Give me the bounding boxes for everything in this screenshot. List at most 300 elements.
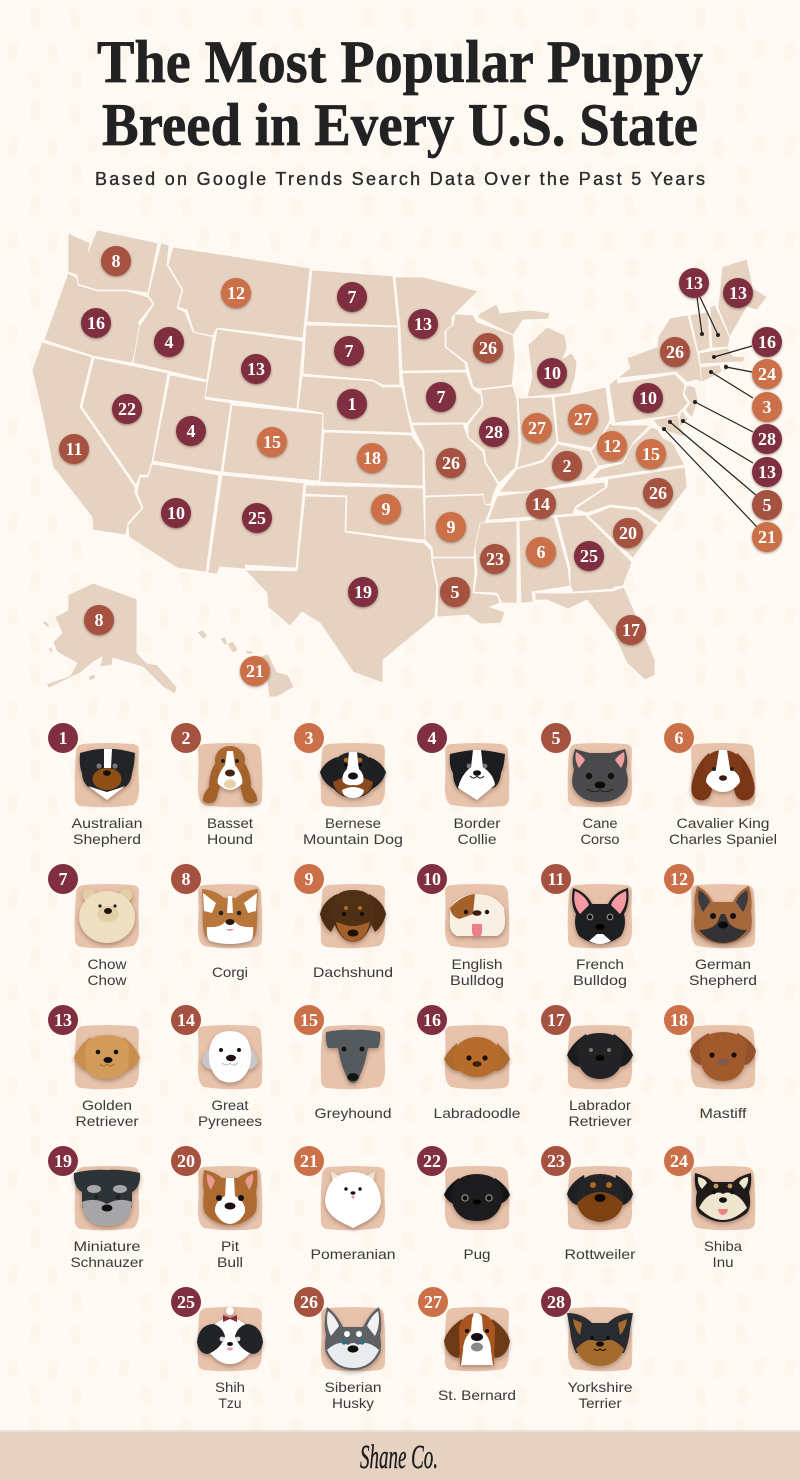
- label: Mountain Dog: [303, 831, 403, 847]
- badge: MN: 13: [414, 314, 432, 334]
- label: Bulldog: [450, 972, 504, 988]
- badge: OR: 16: [87, 313, 105, 333]
- state: NE: [298, 376, 412, 433]
- label: Miniature: [74, 1238, 141, 1254]
- state: OR: [44, 273, 153, 363]
- state: HI: [197, 630, 294, 697]
- badge: MD: 5: [762, 495, 772, 515]
- label: [704, 1238, 742, 1270]
- label: Basset: [207, 815, 253, 831]
- state: NY: [618, 315, 703, 383]
- badge: 2: 2: [182, 728, 190, 748]
- label: Retriever: [76, 1113, 139, 1129]
- badge: 22: 22: [423, 1151, 441, 1171]
- badge: NY: 26: [666, 342, 684, 362]
- state: MS: [474, 521, 517, 603]
- label: Labradoodle: [433, 1105, 521, 1121]
- label: [573, 956, 627, 988]
- state: MI: [477, 304, 577, 397]
- breed 11: French Bulldog: [541, 864, 632, 988]
- badge: VT and NH: [679, 268, 709, 298]
- face: Chow Chow: [79, 888, 135, 943]
- label: Yorkshire: [568, 1379, 633, 1395]
- state: KS: [320, 432, 423, 486]
- title: The Most Popular Puppy: [97, 29, 703, 95]
- label: Inu: [712, 1254, 734, 1270]
- label: Greyhound: [314, 1105, 392, 1121]
- badge: WI: 26: [479, 338, 497, 358]
- badge: 6: 6: [674, 728, 684, 748]
- label: Husky: [332, 1395, 374, 1411]
- badge: IL: 28: [485, 422, 503, 442]
- state: NJ: [684, 385, 698, 418]
- badge: SC: 20: [619, 523, 637, 543]
- label: [303, 815, 403, 847]
- badge: CA: [59, 434, 89, 464]
- badge: MO: 26: [442, 453, 460, 473]
- label: Siberian: [324, 1379, 382, 1395]
- badge: 12: 12: [670, 869, 688, 889]
- badge: PA: [633, 383, 663, 413]
- label: Dachshund: [313, 964, 393, 980]
- label: French: [576, 956, 624, 972]
- badge: 18: 18: [670, 1010, 688, 1030]
- face: Golden Retriever: [74, 1035, 140, 1079]
- badge: GA: 25: [580, 546, 598, 566]
- face: St. Bernard: [444, 1313, 510, 1365]
- badge: OH: [568, 404, 598, 434]
- badge: 5: 5: [552, 728, 560, 748]
- badge: AR: [436, 512, 466, 542]
- badge: VA: 15: [642, 444, 660, 464]
- state: IA: [402, 372, 482, 423]
- state: AZ: [128, 464, 219, 572]
- badge: 9: 9: [304, 869, 314, 889]
- badge: AR: 9: [446, 517, 456, 537]
- label: [580, 815, 620, 847]
- breed 16: Labradoodle: [417, 1005, 521, 1121]
- badge: NJ: 28: [758, 429, 776, 449]
- badge: MS: 23: [486, 549, 504, 569]
- badge: OR: [81, 308, 111, 338]
- map of U.S. states: [32, 230, 767, 697]
- label: [568, 1379, 633, 1411]
- badge: OK: [371, 494, 401, 524]
- label: Pyrenees: [198, 1113, 262, 1129]
- badge: AZ: [161, 498, 191, 528]
- badge: UT: [176, 416, 206, 446]
- state: AR: [425, 495, 492, 557]
- badge: WV: 12: [603, 436, 621, 456]
- breed 15: Greyhound: [294, 1005, 392, 1121]
- badge: 15: 15: [300, 1010, 318, 1030]
- state: CT: [700, 365, 722, 382]
- label: Corgi: [212, 964, 248, 980]
- state: KY: [499, 444, 598, 492]
- state: FL: [535, 587, 655, 680]
- badge: NY: [660, 337, 690, 367]
- label: [669, 815, 777, 847]
- badge: VT and NH: 13: [685, 273, 703, 293]
- label: Corso: [580, 831, 620, 847]
- state: ID: [133, 243, 213, 380]
- label: [689, 956, 757, 988]
- state: OH: [554, 387, 610, 448]
- label: Great: [212, 1097, 249, 1113]
- breed 25: Shih Tzu: [171, 1287, 263, 1411]
- badge: MO: [436, 448, 466, 478]
- label: Chow: [88, 956, 127, 972]
- badge: HI: 21: [246, 661, 264, 681]
- state: NM: [208, 475, 304, 574]
- breed 12: German Shepherd: [664, 864, 757, 988]
- badge: 25: 25: [177, 1292, 195, 1312]
- label: Retriever: [568, 1113, 632, 1129]
- leader lines: [662, 297, 757, 527]
- label: [217, 1238, 243, 1270]
- badge: MS: [480, 544, 510, 574]
- badge: KY: [552, 451, 582, 481]
- badge: MT: 12: [227, 283, 245, 303]
- badge: CT: 3: [762, 397, 772, 417]
- label: St. Bernard: [438, 1387, 516, 1403]
- breed 27: St. Bernard: [418, 1287, 516, 1403]
- state: NC: [575, 467, 687, 523]
- breed 7: Chow Chow: [48, 864, 139, 988]
- label: [450, 956, 504, 988]
- face: Rottweiler: [567, 1174, 633, 1222]
- badge: TX: [348, 577, 378, 607]
- label: [198, 1097, 262, 1129]
- label: [88, 956, 127, 988]
- badge: 27: 27: [424, 1292, 442, 1312]
- face: Great Pyrenees: [202, 1031, 258, 1082]
- breed 20: Pit Bull: [171, 1146, 262, 1270]
- face: Mastiff: [690, 1032, 756, 1081]
- breed 2: Basset Hound: [171, 723, 262, 847]
- state: TX: [245, 496, 437, 683]
- badge: NE: 1: [348, 394, 356, 414]
- label: Schnauzer: [70, 1254, 144, 1270]
- badge: NC: [643, 478, 673, 508]
- badge: 13: 13: [54, 1010, 72, 1030]
- badge: TN: 14: [532, 494, 550, 514]
- badge: 10: 10: [423, 869, 441, 889]
- badge: FL: 17: [622, 620, 640, 640]
- badge: CT: [752, 392, 782, 422]
- label: [324, 1379, 382, 1411]
- badge: 17: 17: [547, 1010, 565, 1030]
- face: Corgi: [202, 889, 258, 944]
- badge: IA: 7: [436, 387, 446, 407]
- label: Terrier: [578, 1395, 622, 1411]
- label: Cavalier King: [676, 815, 770, 831]
- breed 3: Bernese Mountain Dog: [294, 723, 403, 847]
- badge: KS: 18: [363, 448, 381, 468]
- badge: WY: 13: [247, 359, 265, 379]
- breed 17: Labrador Retriever: [541, 1005, 633, 1129]
- breed 24: Shiba Inu: [664, 1146, 755, 1270]
- state: CA: [32, 342, 142, 535]
- badge: DE: 13: [758, 462, 776, 482]
- badge: ID: 4: [164, 332, 174, 352]
- badge: NV: [112, 394, 142, 424]
- face: Pomeranian: [325, 1171, 381, 1228]
- badge: IN: [522, 413, 552, 443]
- state: UT: [153, 375, 231, 472]
- badge: TX: 19: [354, 582, 372, 602]
- face: Cavalier King Charles Spaniel: [691, 750, 755, 800]
- label: Pomeranian: [310, 1246, 396, 1262]
- badge: LA: [440, 577, 470, 607]
- badge: NV: 22: [118, 399, 136, 419]
- badge: IA: [426, 382, 456, 412]
- label: [72, 815, 142, 847]
- state: IN: [517, 397, 557, 468]
- label: Hound: [207, 831, 253, 847]
- state: GA: [557, 515, 632, 592]
- face: Cane Corso: [572, 749, 628, 802]
- badge: WV: [597, 431, 627, 461]
- title: [97, 29, 703, 158]
- label: Shepherd: [689, 972, 757, 988]
- label: Shiba: [704, 1238, 742, 1254]
- badge: NM: 25: [248, 508, 266, 528]
- state: WY: [205, 329, 303, 409]
- breed 6: Cavalier King Charles Spaniel: [664, 723, 777, 847]
- badge: ND: 7: [348, 287, 356, 307]
- face: English Bulldog: [450, 894, 505, 937]
- badge: 24: 24: [670, 1151, 688, 1171]
- state: WV: [591, 423, 650, 466]
- state: DE: [679, 410, 688, 427]
- badge: WA: [101, 246, 131, 276]
- label: Labrador: [569, 1097, 631, 1113]
- face: Border Collie: [450, 750, 505, 800]
- badge: CO: [257, 427, 287, 457]
- state: OK: [305, 485, 425, 540]
- breed legend: [48, 723, 777, 1411]
- badge: NM: [242, 503, 272, 533]
- breed 9: Dachshund: [294, 864, 393, 980]
- badge: MN: [408, 309, 438, 339]
- label: Shih: [215, 1379, 245, 1395]
- state: MD: [653, 415, 685, 437]
- badge: 26: 26: [300, 1292, 318, 1312]
- badge: IL: [479, 417, 509, 447]
- badge: NE: [337, 389, 367, 419]
- label: Tzu: [218, 1395, 242, 1411]
- badge: 21: 21: [300, 1151, 318, 1171]
- label: [207, 815, 253, 847]
- breed 8: Corgi: [171, 864, 262, 980]
- badge: NC: 26: [649, 483, 667, 503]
- label: Shepherd: [73, 831, 141, 847]
- state: PA: [609, 374, 688, 423]
- face: Bernese Mountain Dog: [320, 752, 386, 798]
- state: WA: [68, 230, 158, 293]
- state: ND: [307, 270, 398, 326]
- badge: MA: [752, 327, 782, 357]
- face: Labrador Retriever: [567, 1033, 633, 1079]
- state: CO: [223, 405, 323, 481]
- label: German: [695, 956, 751, 972]
- badge: MD: [752, 490, 782, 520]
- face: Shiba Inu: [695, 1173, 751, 1222]
- badge: 20: 20: [177, 1151, 195, 1171]
- state: MO: [412, 424, 498, 504]
- badge: OH: 27: [574, 409, 592, 429]
- label: Pug: [464, 1246, 490, 1262]
- badge: SC: [613, 518, 643, 548]
- badge: DE: [752, 457, 782, 487]
- badge: 1: 1: [58, 728, 68, 748]
- label: Rottweiler: [564, 1246, 636, 1262]
- face: German Shepherd: [694, 886, 752, 944]
- badge: GA: [574, 541, 604, 571]
- label: [76, 1097, 139, 1129]
- badge: 11: 11: [547, 869, 565, 889]
- face: Yorkshire Terrier: [567, 1313, 633, 1366]
- face: Labradoodle: [444, 1037, 510, 1077]
- badge: RI: [752, 359, 782, 389]
- state: RI: [723, 363, 730, 372]
- badge: CO: 15: [263, 432, 281, 452]
- label: [568, 1097, 632, 1129]
- breed 28: Yorkshire Terrier: [541, 1287, 633, 1411]
- badge: DC: 21: [758, 527, 776, 547]
- label: Charles Spaniel: [669, 831, 777, 847]
- breed 10: English Bulldog: [417, 864, 509, 988]
- badge: AL: 6: [536, 542, 546, 562]
- badge: WA: 8: [112, 251, 120, 271]
- state: WI: [446, 314, 515, 389]
- badge: KS: [357, 443, 387, 473]
- breed 21: Pomeranian: [294, 1146, 396, 1262]
- label: Chow: [88, 972, 127, 988]
- label: Border: [454, 815, 501, 831]
- badge: AL: [526, 537, 556, 567]
- state: LA: [432, 558, 505, 624]
- badge: AZ: 10: [167, 503, 185, 523]
- badge: OK: 9: [382, 499, 390, 519]
- badge: HI: [240, 656, 270, 686]
- face: Pit Bull: [203, 1170, 257, 1225]
- badge: 3: 3: [304, 728, 314, 748]
- state: NV: [82, 358, 168, 485]
- badge: KY: 2: [562, 456, 572, 476]
- label: [215, 1379, 245, 1411]
- footer band: [0, 1430, 800, 1480]
- state: ME: [718, 259, 767, 337]
- badge: ID: [154, 327, 184, 357]
- face: Basset Hound: [203, 746, 257, 803]
- badge: 7: 7: [58, 869, 68, 889]
- badge: SD: 7: [344, 341, 354, 361]
- state: IL: [468, 386, 519, 483]
- badge: 16: 16: [423, 1010, 441, 1030]
- badge: MA: 16: [758, 332, 776, 352]
- state: MN: [395, 277, 478, 371]
- badge: VA: [636, 439, 666, 469]
- badge: 4: 4: [428, 728, 436, 748]
- label: Bull: [217, 1254, 243, 1270]
- badge: MI: [537, 358, 567, 388]
- badge: MI: 10: [543, 363, 561, 383]
- breed 4: Border Collie: [417, 723, 509, 847]
- badge: WI: [473, 333, 503, 363]
- label: Bulldog: [573, 972, 627, 988]
- face: Pug: [444, 1174, 510, 1221]
- breed 19: Miniature Schnauzer: [48, 1146, 144, 1270]
- face: Greyhound: [326, 1030, 380, 1083]
- label: Collie: [458, 831, 497, 847]
- badge: AK: 8: [94, 610, 104, 630]
- state: VA: [592, 427, 685, 479]
- state: VT: [690, 312, 710, 352]
- badge: WY: [241, 354, 271, 384]
- breed 23: Rottweiler: [541, 1146, 636, 1262]
- badge: TN: [526, 489, 556, 519]
- state number badges: [59, 246, 782, 686]
- state: NH: [710, 305, 730, 348]
- badge: UT: 4: [186, 421, 196, 441]
- face: Dachshund: [320, 890, 386, 942]
- title: Breed in Every U.S. State: [102, 92, 698, 158]
- label: Australian: [72, 815, 142, 831]
- label: [70, 1238, 144, 1270]
- state: SD: [303, 325, 400, 385]
- badge: AK: [84, 605, 114, 635]
- badge: SD: [334, 336, 364, 366]
- breed 5: Cane Corso: [541, 723, 632, 847]
- state: AK: [42, 583, 177, 694]
- breed 26: Siberian Husky: [294, 1287, 385, 1411]
- badge: 19: 19: [54, 1151, 72, 1171]
- state: SC: [588, 507, 658, 558]
- breed 22: Pug: [417, 1146, 510, 1262]
- face: Shih Tzu: [197, 1307, 263, 1364]
- state: AL: [519, 517, 570, 603]
- state: MT: [168, 247, 310, 338]
- label: Golden: [82, 1097, 132, 1113]
- badge: 23: 23: [547, 1151, 565, 1171]
- face: Siberian Husky: [325, 1307, 381, 1370]
- badge: ME: [723, 278, 753, 308]
- label: Mastiff: [700, 1105, 747, 1121]
- breed 1: Australian Shepherd: [48, 723, 142, 847]
- face: Miniature Schnauzer: [74, 1170, 140, 1226]
- badge: MT: [221, 278, 251, 308]
- badge: 14: 14: [177, 1010, 195, 1030]
- label: [454, 815, 501, 847]
- label: English: [451, 956, 503, 972]
- badge: RI: 24: [758, 364, 776, 384]
- subtitle: Based on Google Trends Search Data Over the Past 5 Years: [95, 169, 705, 189]
- breed 18: Mastiff: [664, 1005, 756, 1121]
- breed 14: Great Pyrenees: [171, 1005, 262, 1129]
- label: Pit: [221, 1238, 239, 1254]
- face: Australian Shepherd: [80, 749, 135, 800]
- badge: PA: 10: [639, 388, 657, 408]
- badge: 8: 8: [182, 869, 190, 889]
- badge: 28: 28: [547, 1292, 565, 1312]
- badge: ME: 13: [729, 283, 747, 303]
- state: TN: [488, 482, 606, 520]
- badge: IN: 27: [528, 418, 546, 438]
- face: French Bulldog: [572, 888, 628, 944]
- label: Cane: [582, 815, 618, 831]
